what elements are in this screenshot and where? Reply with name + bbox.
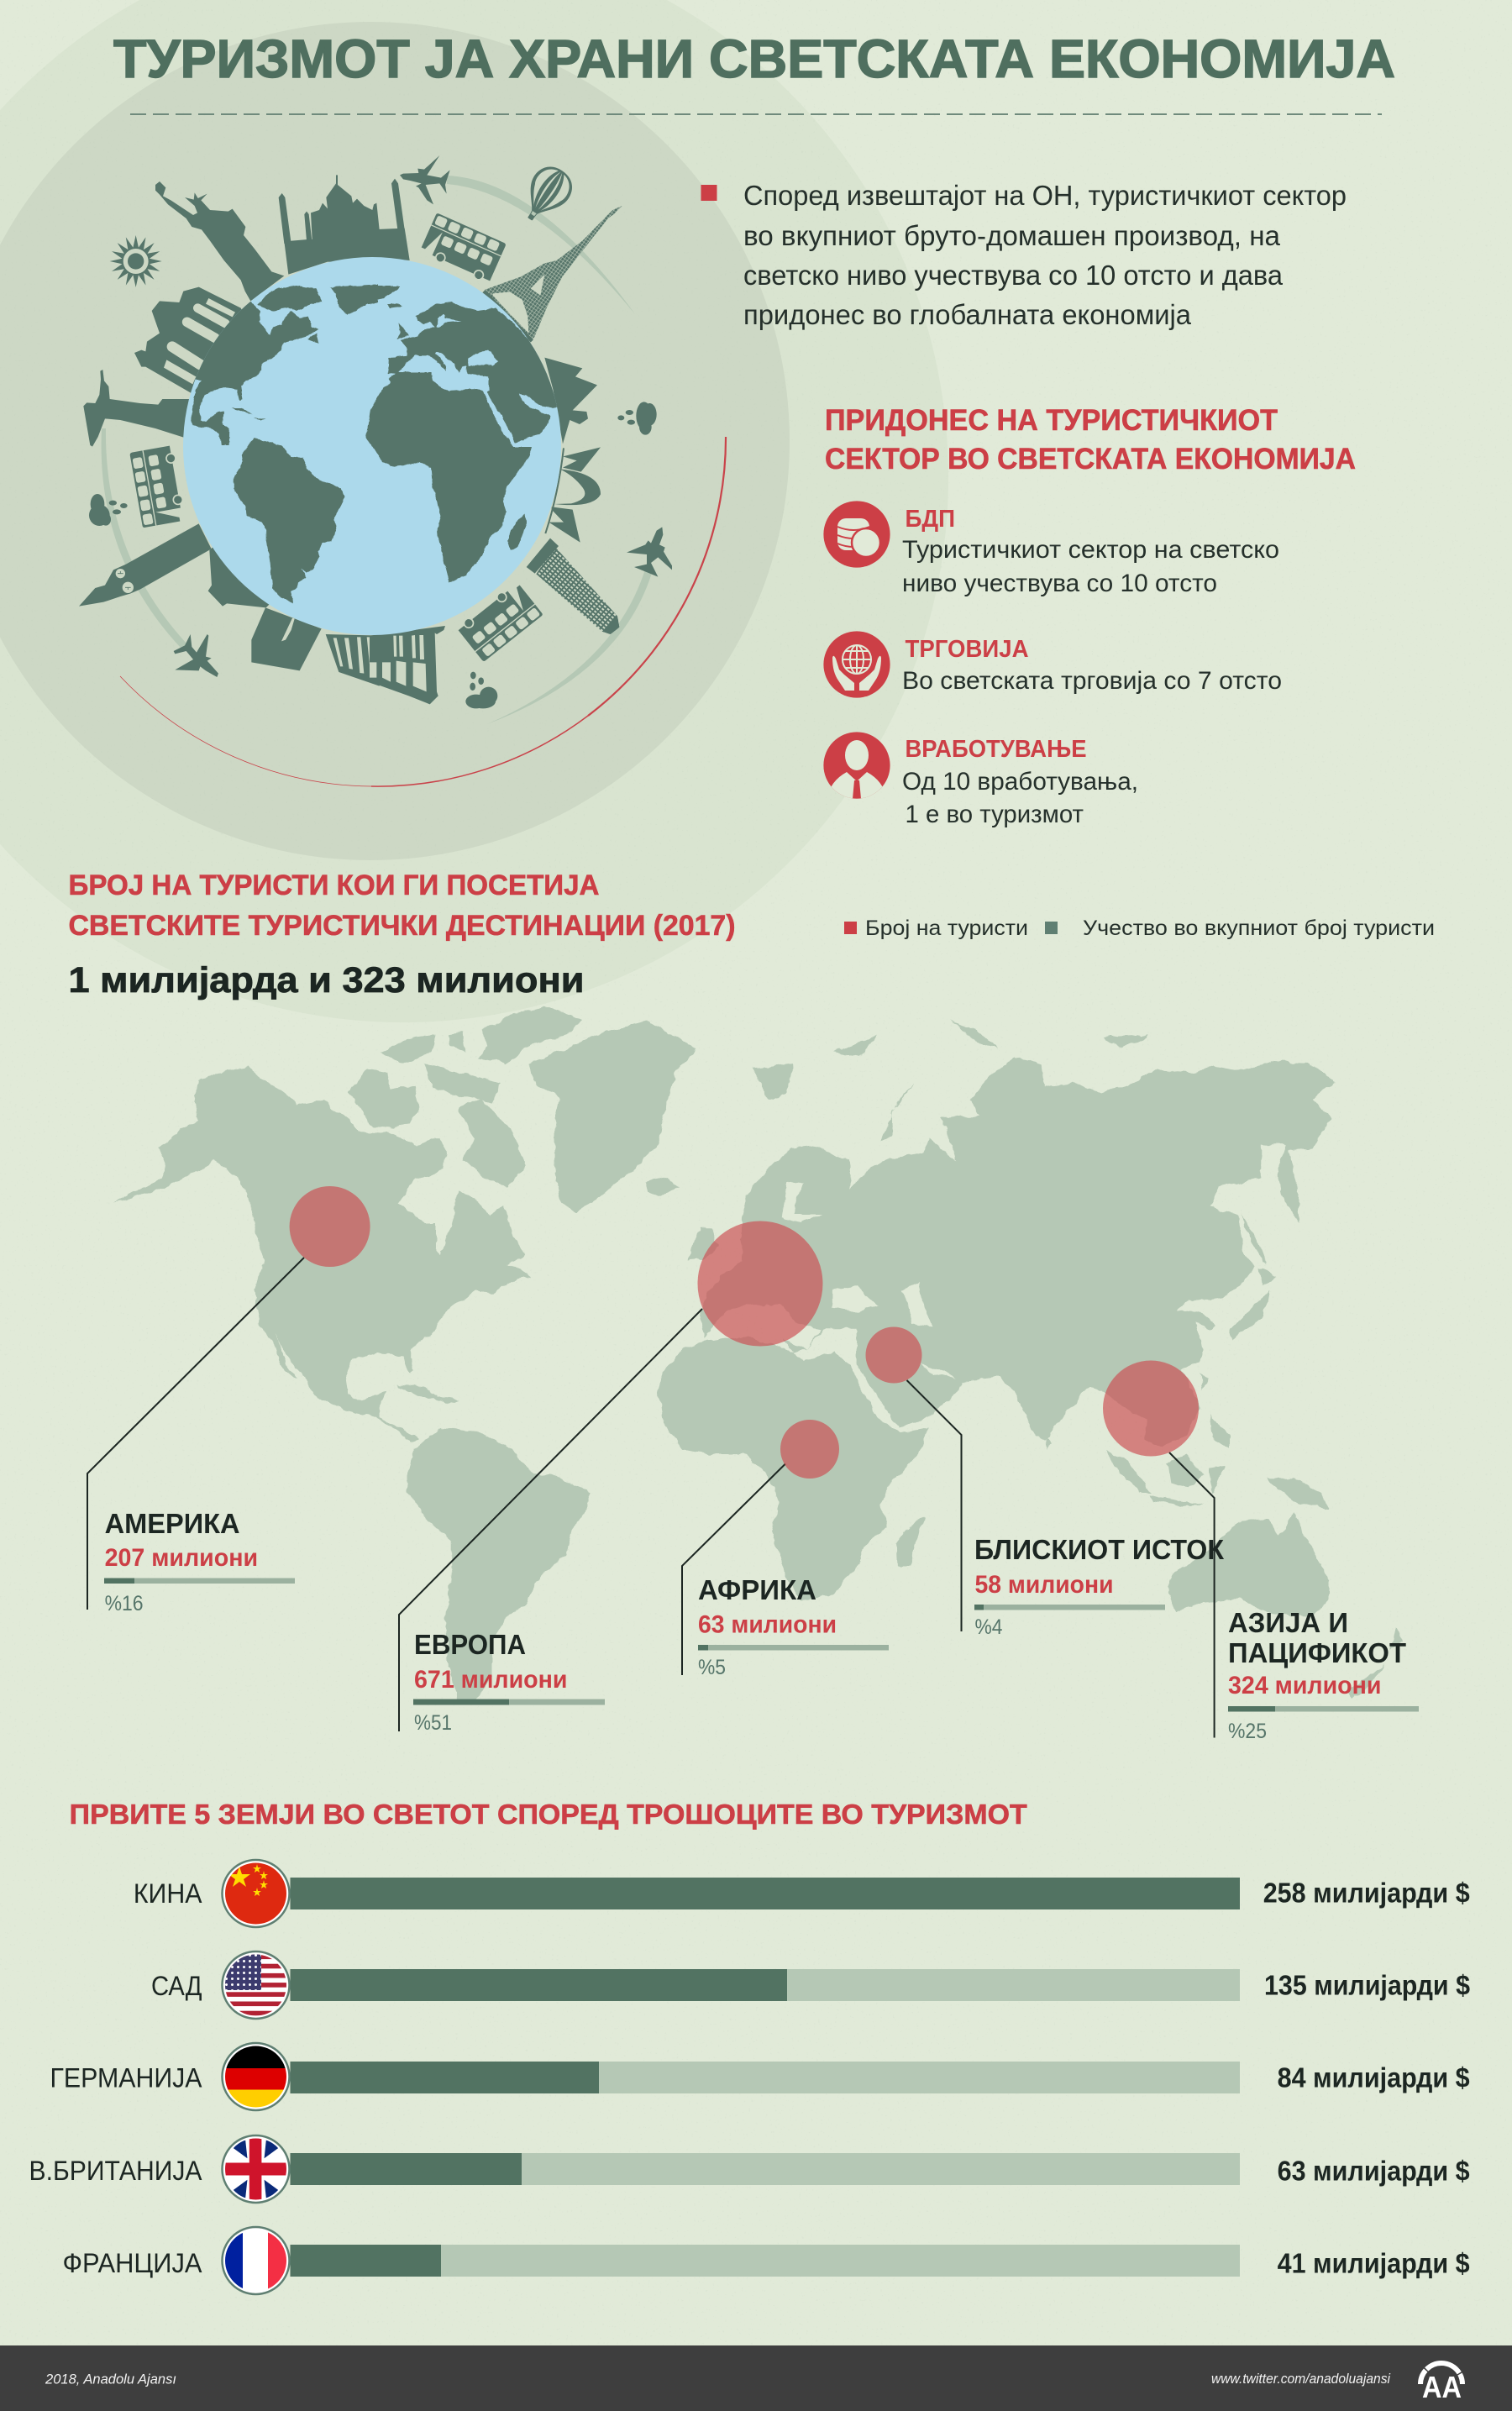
gdp item [902,506,1279,597]
icon: cloud [465,672,497,708]
icon: statue of liberty [155,181,284,301]
icon: fort [208,546,271,607]
trade item: ТРГОВИЈА [906,636,1029,663]
row: germany: ГЕРМАНИЈА [50,2063,202,2093]
icon: double decker bus [418,213,507,285]
total tourists: 1 милијарда и 323 милиони [69,960,585,1001]
legend [844,917,1435,940]
section heading: tourists by destination: СВЕТСКИТЕ ТУРИСТИЧКИ ДЕСТИНАЦИИ (2017) [69,910,736,942]
intro paragraph: Според извештајот на ОН, туристичкиот сектор [743,180,1347,211]
icon: taj mahal right part [370,179,410,260]
callout: asia and pacific: АЗИЈА И [1228,1607,1348,1638]
intro paragraph: придонес во глобалната економија [743,299,1192,330]
americas and arctic [113,1006,696,1710]
panel: contribution to world economy [823,404,1356,828]
row: germany [50,2043,1470,2110]
intro paragraph: светско ниво учествува со 10 отсто и дава [743,260,1284,291]
icon: cloud [89,494,128,526]
row: uk: 63 милијарди $ [1278,2156,1470,2186]
south america [234,439,344,603]
icon: airplane [400,155,450,204]
row: uk: В.БРИТАНИЈА [29,2156,202,2186]
icon: pyramids [544,358,597,444]
section heading: tourists by destination: БРОЈ НА ТУРИСТИ КОИ ГИ ПОСЕТИЈА [69,869,600,901]
icon: hot air balloon [513,160,580,231]
callout: america [104,1508,295,1615]
row: china: КИНА [134,1878,202,1909]
inner background circle [0,22,790,860]
icon: skyscraper [251,607,322,670]
row: usa: 135 милијарди $ [1264,1969,1470,2001]
landmarks lower left [79,445,380,686]
legend: Учество во вкупниот број туристи [1083,917,1435,940]
outer background circle [0,0,948,1022]
bullet [701,185,717,201]
illustration: globe with world landmarks [79,155,726,786]
callout: europe: ЕВРОПА [414,1629,526,1660]
trade item [902,636,1282,695]
row: uk [29,2135,1470,2204]
icon: colonnade right part [370,626,445,704]
row: china: 258 милијарди $ [1263,1877,1470,1909]
section heading: top 5 spenders: ПРВИТЕ 5 ЗЕМЈИ ВО СВЕТОТ СПОРЕД ТРОШОЦИТЕ ВО ТУРИЗМОТ [70,1799,1027,1830]
callout: middle east [974,1534,1225,1639]
callout: africa: %5 [698,1656,726,1679]
landmarks upper right [370,155,657,444]
heading: ПРИДОНЕС НА ТУРИСТИЧКИОТ [825,404,1278,437]
leader lines [87,1258,1215,1737]
employment item: Од 10 вработувања, [902,768,1138,796]
callout: africa [698,1574,889,1679]
employment item [902,736,1138,828]
heading [825,404,1356,475]
icon: triumphal arch [134,287,258,395]
icon: sun [110,235,162,287]
heading: СЕКТОР ВО СВЕТСКАТА ЕКОНОМИЈА [825,443,1356,475]
row: usa [151,1951,1470,2019]
world map [113,1006,1404,1710]
icon: airplane [627,527,672,577]
icon: big ben [79,523,212,607]
callout: asia and pacific [1228,1607,1419,1743]
callout: europe: %51 [414,1711,452,1735]
title: ТУРИЗМОТ ЈА ХРАНИ СВЕТСКАТА ЕКОНОМИЈА [113,29,1395,89]
row: usa: САД [151,1971,202,2001]
icon: sydney opera house [545,447,601,543]
intro paragraph [743,180,1347,330]
callout: asia and pacific: %25 [1228,1720,1267,1743]
icon: tower of pisa [527,538,619,634]
icon: taj mahal left part [279,175,380,275]
gdp item: Туристичкиот сектор на светско [902,536,1279,564]
callout: asia and pacific: 324 милиони [1228,1672,1381,1699]
greenland end and iceland [378,286,557,444]
callout: africa: АФРИКА [698,1574,816,1605]
icon: cloud [617,402,657,435]
legend: Број на туристи [865,917,1028,940]
row: france [62,2227,1470,2295]
gdp item: БДП [906,506,955,533]
row: china [134,1860,1470,1928]
intro text block [701,180,1347,330]
callout: america: %16 [105,1592,144,1615]
callout: europe [413,1629,605,1735]
landmarks lower right [370,447,672,708]
icon: coins [823,501,890,568]
north america and arctic [187,284,378,445]
globe ocean [183,257,561,635]
row: france: 41 милијарди $ [1278,2248,1470,2278]
gdp item: ниво учествува со 10 отсто [902,570,1217,597]
logo: AA: AA [1422,2370,1462,2404]
icon: eiffel tower [484,206,622,341]
landmarks upper left [83,175,380,447]
callout: middle east: %4 [974,1615,1003,1639]
bar chart: tourism spending [29,1860,1470,2295]
eurasia africa oceania [658,1020,1404,1700]
africa [366,372,532,582]
icon: christ the redeemer [83,370,189,447]
icon: double decker bus [455,580,543,662]
row: france: ФРАНЦИЈА [62,2248,202,2278]
orbit arcs [102,176,652,724]
icon: hands holding globe [823,631,890,698]
icon: colonnade left part [326,634,380,686]
callout: europe: 671 милиони [414,1666,568,1694]
employment item: ВРАБОТУВАЊЕ [906,736,1087,763]
employment item: 1 е во туризмот [906,801,1084,828]
callout: america: АМЕРИКА [105,1508,240,1539]
callout: middle east: БЛИСКИОТ ИСТОК [974,1534,1225,1565]
callout: africa: 63 милиони [698,1611,837,1638]
seas cut out of eurasia [753,1182,956,1379]
footer [0,2345,1512,2411]
red orbit arc [120,437,726,786]
callout: asia and pacific: ПАЦИФИКОТ [1228,1637,1406,1668]
row: germany: 84 милијарди $ [1278,2062,1470,2093]
footer credit: 2018, Anadolu Ajansı [45,2371,176,2387]
callout: middle east: 58 милиони [974,1571,1114,1599]
section heading: tourists by destination [69,869,736,942]
callout: america: 207 милиони [105,1544,258,1572]
intro paragraph: во вкупниот бруто-домашен производ, на [743,220,1281,251]
trade item: Во светската трговија со 7 отсто [902,667,1282,695]
region bubbles [290,1186,1199,1479]
eurasia [389,302,571,443]
madagascar [507,514,527,550]
icon: businessman [823,732,890,805]
globe continents [187,284,571,603]
footer url: www.twitter.com/anadoluajansi [1211,2371,1391,2387]
icon: double decker bus [129,445,187,528]
icon: airplane [174,634,218,677]
